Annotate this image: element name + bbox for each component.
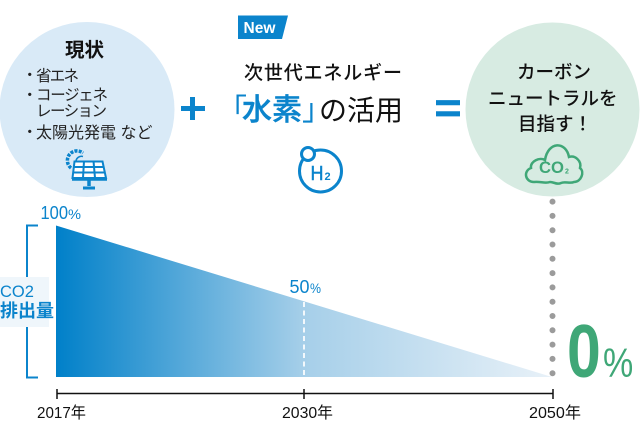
- label: 0%: %: [603, 340, 633, 386]
- heading: use of hydrogen: 水素: [242, 94, 302, 127]
- timeline labels: [37, 404, 581, 422]
- panel: current state circle: [0, 22, 174, 197]
- text: carbon neutral goal: 目指す！: [518, 114, 592, 134]
- icon: CO2 cloud: 2: [565, 168, 569, 176]
- heading: current state: 現状: [65, 40, 105, 62]
- label: 50%: 50: [290, 277, 310, 297]
- icon: CO2 cloud: CO: [539, 159, 564, 177]
- equals sign: [436, 103, 460, 114]
- icon: hydrogen: H: [310, 163, 324, 185]
- icon: solar panel: [67, 151, 107, 188]
- heading: use of hydrogen: [217, 94, 403, 127]
- list: current measures: コージェネ: [36, 86, 108, 104]
- list: current measures: ・: [22, 67, 38, 84]
- list: current measures: 太陽光発電 など: [36, 124, 152, 142]
- list: current measures: 省エネ: [36, 67, 79, 85]
- area: emissions wedge: [56, 226, 552, 377]
- icon: hydrogen: [300, 148, 342, 192]
- heading: use of hydrogen: 」: [302, 94, 332, 127]
- list: current measures: レーション: [36, 103, 107, 120]
- timeline labels: 2017年: [37, 404, 86, 422]
- timeline axis: [57, 389, 553, 399]
- y axis bracket: [27, 226, 38, 378]
- heading: next generation energy: 次世代エネルギー: [244, 62, 402, 84]
- badge: New: [238, 16, 288, 39]
- label: CO2 emissions: 排出量: [0, 301, 54, 321]
- list: current measures: ・: [22, 124, 38, 141]
- text: carbon neutral goal: [488, 62, 618, 134]
- icon: CO2 cloud: [526, 145, 582, 184]
- plus sign: [181, 97, 205, 120]
- label: CO2 emissions: [0, 277, 54, 327]
- line: 2030 dashed marker: [303, 302, 305, 377]
- heading: use of hydrogen: 「: [217, 94, 247, 127]
- badge: New: New: [244, 20, 276, 37]
- timeline labels: 2050年: [529, 404, 581, 422]
- dotted line to zero: [550, 202, 556, 374]
- label: CO2 emissions: CO2: [0, 283, 34, 301]
- label: 0%: 0: [567, 310, 601, 393]
- heading: use of hydrogen: の活用: [319, 95, 403, 126]
- label: 50%: [290, 277, 321, 297]
- list: current measures: [22, 67, 152, 142]
- label: 50%: %: [310, 280, 321, 296]
- icon: hydrogen: 2: [324, 171, 331, 183]
- timeline labels: 2030年: [282, 404, 333, 422]
- panel: carbon neutral goal circle: [466, 22, 640, 196]
- text: carbon neutral goal: ニュートラルを: [488, 88, 618, 109]
- label: 100%: %: [68, 206, 81, 222]
- label: 100%: 100: [40, 203, 68, 223]
- chart: emissions reduction: [0, 202, 633, 422]
- text: carbon neutral goal: カーボン: [517, 62, 591, 82]
- label: 0%: [567, 310, 633, 393]
- list: current measures: ・: [22, 87, 38, 104]
